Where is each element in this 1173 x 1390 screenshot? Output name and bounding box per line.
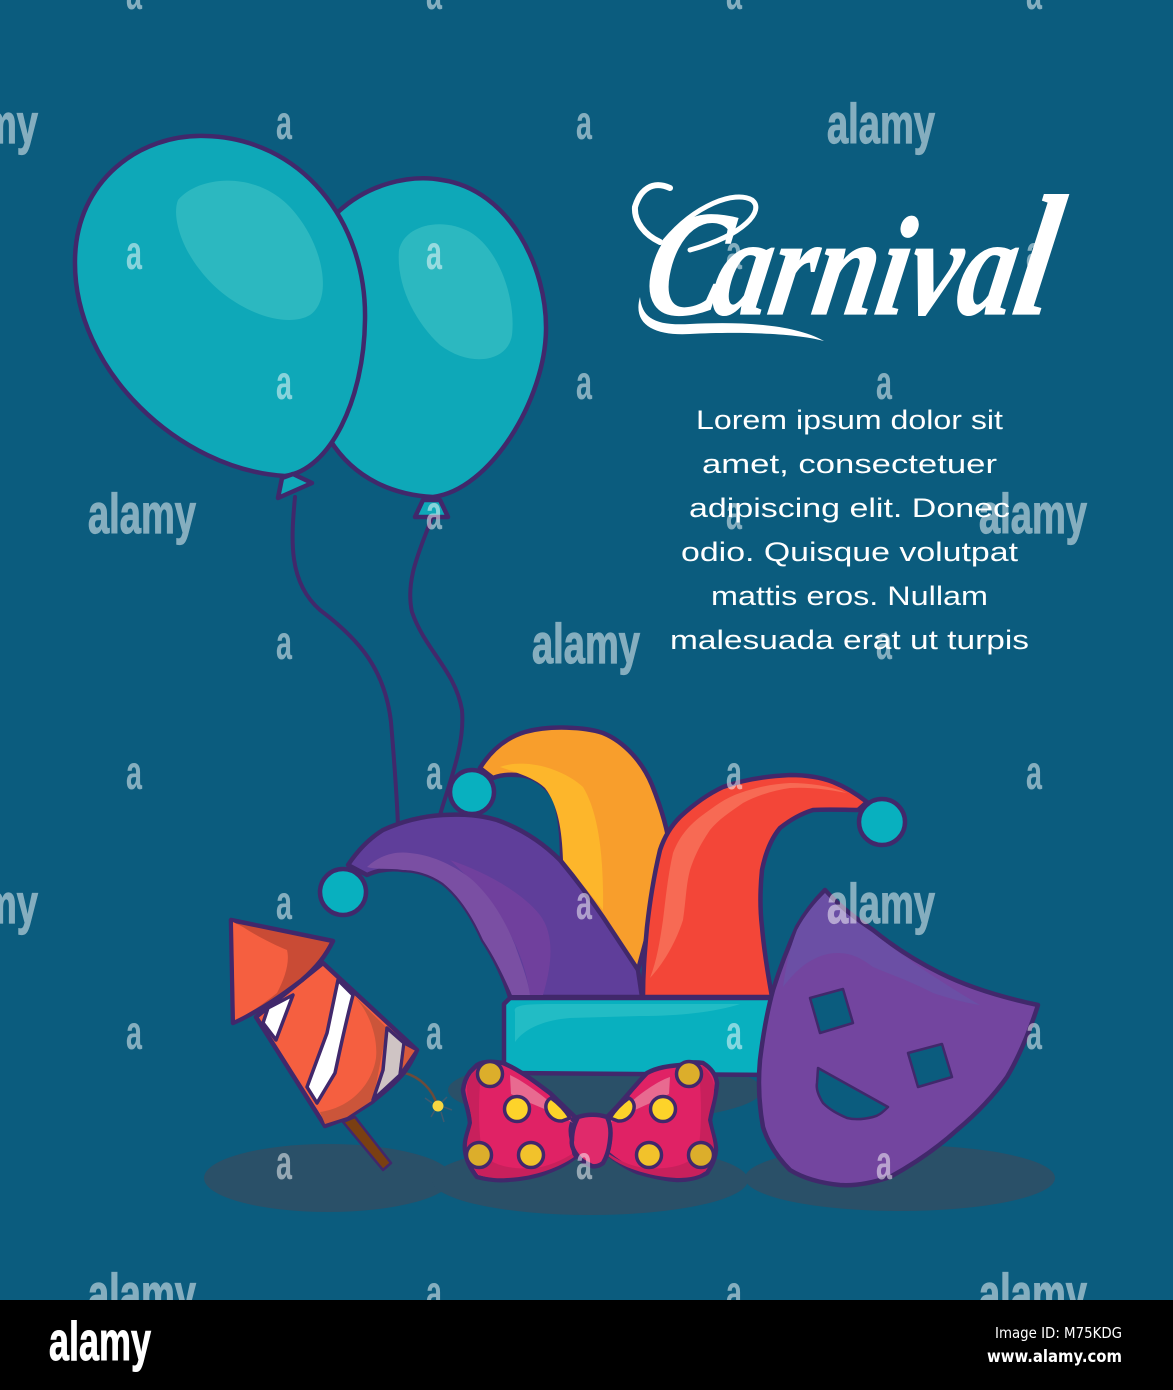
watermark: alamy repeats: alamy [979,1262,1087,1325]
rocket stripes [263,980,404,1103]
rocket body [256,963,417,1126]
watermark: alamy repeats: alamy [88,1262,196,1325]
watermark: small a repeats: a [276,617,292,670]
watermark: alamy repeats: alamy [532,612,640,675]
watermark: small a repeats: a [126,227,142,280]
body text block: amet, consectetuer [702,449,997,479]
watermark: small a repeats: a [426,747,442,800]
balloon strings [293,497,462,826]
watermark: small a repeats: a [276,97,292,150]
bow wings [463,1062,575,1180]
body text block: adipiscing elit. Donec [689,493,1010,523]
firework rocket [231,920,452,1170]
watermark: small a repeats: a [426,1007,442,1060]
balloon left [75,136,365,498]
watermark: small a repeats: a [576,97,592,150]
body text block: Lorem ipsum dolor sit [696,405,1004,435]
watermark: small a repeats: a [876,1137,892,1190]
watermark: small a repeats: a [876,357,892,410]
watermark: small a repeats: a [876,617,892,670]
title: Carnival: Carnival [633,162,1075,352]
watermark: small a repeats: a [426,1267,442,1320]
watermark: small a repeats: a [1026,747,1042,800]
hat purple point [348,815,642,997]
theatre mask [759,890,1038,1185]
watermark: small a repeats: a [126,747,142,800]
rocket body shade [320,995,387,1124]
rocket fuse [405,1073,452,1122]
body text block: malesuada erat ut turpis [670,625,1029,655]
bow knot [572,1115,611,1166]
watermark: small a repeats: a [126,1007,142,1060]
watermark: small a repeats: a [276,877,292,930]
footer bar [0,1300,1173,1390]
jester hat [320,728,905,1075]
watermark: small a repeats: a [726,227,742,280]
rocket nose cone [231,920,333,1023]
ground shadows [204,1058,1055,1215]
body text block [670,405,1029,655]
balloon right [330,178,546,517]
watermark: small a repeats [126,0,1042,1320]
footer logo: alamy [49,1310,151,1372]
hat yellow point [480,728,670,970]
body text block: mattis eros. Nullam [711,581,988,611]
bow polka dots [466,1062,714,1168]
watermark: small a repeats: a [276,1137,292,1190]
rocket stick [343,1117,391,1170]
watermark: small a repeats: a [726,747,742,800]
watermark: alamy repeats: alamy [979,482,1087,545]
watermark: alamy repeats: alamy [827,92,935,155]
watermark: alamy repeats: alamy [827,872,935,935]
watermark: small a repeats: a [426,227,442,280]
hat red point [643,775,867,997]
watermark: small a repeats: a [726,1267,742,1320]
watermark: small a repeats: a [1026,1007,1042,1060]
hat bells [320,770,905,915]
body text block: odio. Quisque volutpat [681,537,1019,567]
mask eyes and mouth [810,989,952,1119]
hat band [504,998,772,1075]
watermark: small a repeats: a [576,1137,592,1190]
rocket tail tip [400,1043,417,1075]
watermark: small a repeats: a [576,877,592,930]
watermark: alamy repeats: alamy [88,482,196,545]
mask highlight [783,893,980,1005]
watermark: small a repeats: a [576,357,592,410]
watermark: small a repeats: a [426,487,442,540]
bow tie [463,1062,717,1180]
watermark: small a repeats: a [1026,227,1042,280]
footer url: www.alamy.com [987,1347,1122,1367]
bow shading [467,1066,714,1178]
watermark: small a repeats: a [726,487,742,540]
watermark: small a repeats: a [726,1007,742,1060]
watermark: small a repeats: a [276,357,292,410]
footer image id: Image ID: M75KDG [995,1324,1122,1342]
